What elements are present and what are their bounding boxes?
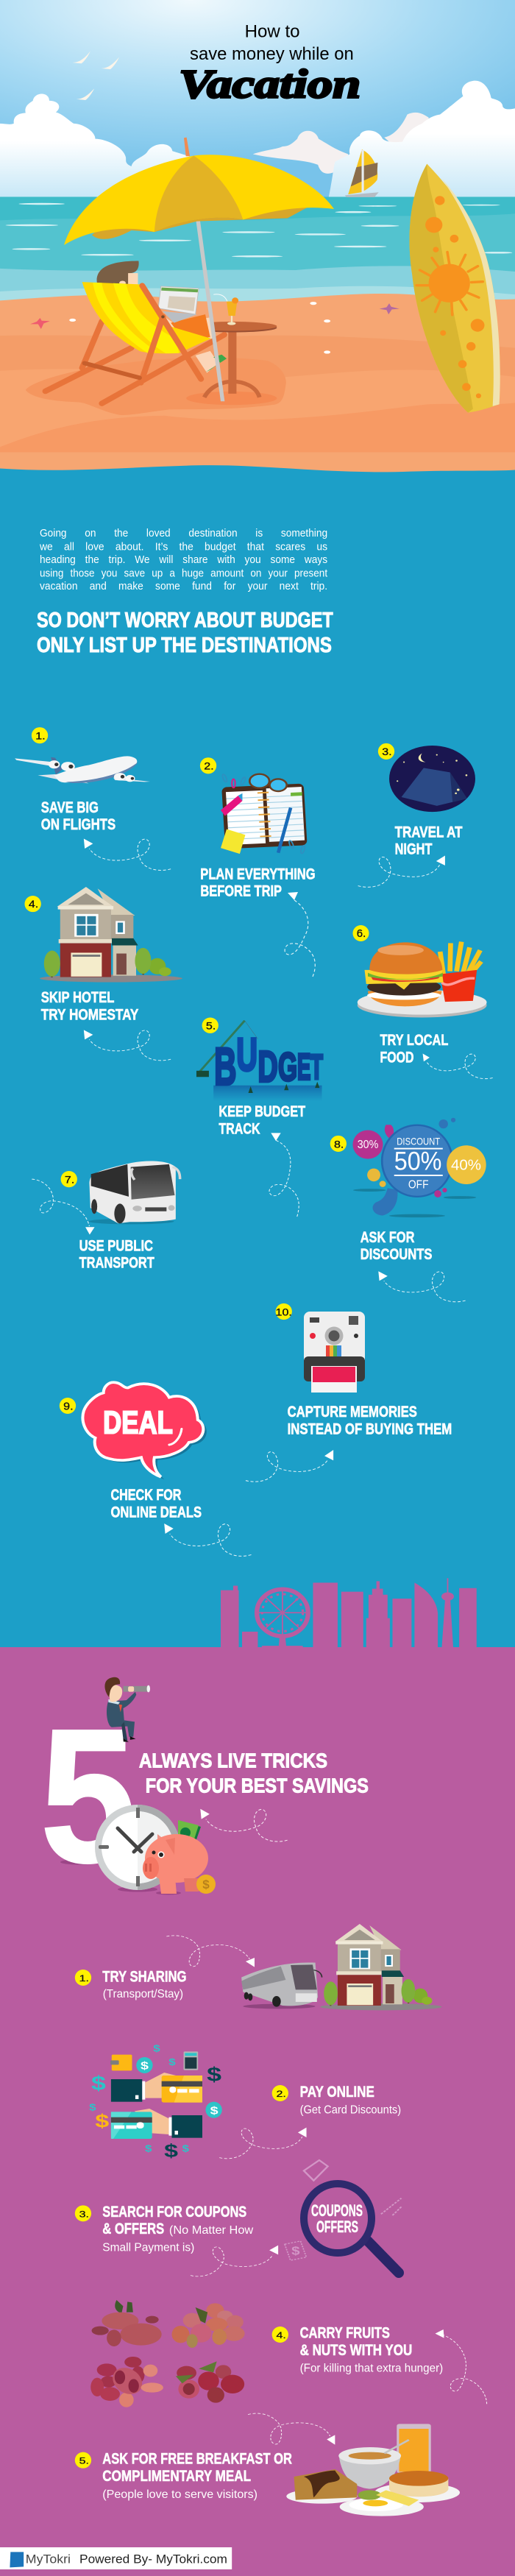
- trick 3 text: & OFFERS: [102, 2221, 164, 2237]
- icon: card payment: $: [145, 2143, 152, 2154]
- title: [179, 21, 360, 107]
- number 6: 6.: [357, 927, 366, 940]
- icon: budget: U: [236, 1028, 258, 1080]
- arrow: [248, 2413, 335, 2445]
- icon: card payment: $: [182, 2143, 190, 2154]
- skyline: [221, 1578, 477, 1648]
- umbrella: [64, 155, 334, 245]
- number 3: 3.: [382, 746, 392, 758]
- trick 1 text: TRY SHARING: [102, 1969, 187, 1985]
- icon: faint dollar ticket: $: [291, 2245, 299, 2257]
- trick 3 text: SEARCH FOR COUPONS: [102, 2204, 246, 2221]
- icon: card payment: $: [141, 2059, 149, 2072]
- heading: always live tricks: FOR YOUR BEST SAVINGS: [146, 1775, 369, 1797]
- label: keep budget track: TRACK: [219, 1119, 260, 1137]
- arrow: [166, 1936, 255, 1967]
- label: plan everything: BEFORE TRIP: [200, 882, 282, 899]
- panel: lower blue section: [0, 1382, 515, 1841]
- number 2: [272, 2085, 288, 2101]
- trick 5 text: COMPLIMENTARY MEAL: [102, 2468, 251, 2485]
- label: try local food: FOOD: [380, 1048, 414, 1066]
- label: plan everything: PLAN EVERYTHING: [200, 865, 316, 882]
- arrow: [436, 2329, 487, 2405]
- label: check for online deals: CHECK FOR: [110, 1485, 181, 1504]
- panel: intro and first tips: [15, 527, 475, 912]
- number 5: 5.: [206, 1021, 216, 1032]
- purple band edge: [0, 1647, 515, 1649]
- icon: white bus: [89, 1161, 180, 1224]
- number 1: [32, 727, 48, 743]
- icon: grey bus: [241, 1962, 322, 2009]
- icon: breakfast: [286, 2424, 460, 2516]
- icon: discount badge: 40%: [451, 1156, 481, 1173]
- intro paragraph: Going on the loved destination is something: [40, 527, 327, 539]
- heading: always live tricks: ALWAYS LIVE TRICKS: [139, 1750, 327, 1772]
- label: ask for discounts: ASK FOR: [360, 1228, 415, 1246]
- table: [188, 322, 277, 397]
- label: try local food: [380, 1031, 448, 1066]
- label: try local food: TRY LOCAL: [380, 1031, 448, 1049]
- arrow: [358, 855, 445, 887]
- shadow under chair: [26, 358, 286, 415]
- footer bar: [0, 2547, 232, 2569]
- panel: five tricks upper: [75, 1924, 441, 2215]
- main heading: SO DON’T WORRY ABOUT BUDGET: [37, 609, 333, 632]
- icon: card payment: $: [210, 2104, 219, 2117]
- icon: card payment: $: [91, 2072, 106, 2094]
- panel: middle tips: [32, 942, 493, 1320]
- umbrella pole: [184, 138, 224, 401]
- businessman with telescope: [104, 1677, 150, 1742]
- back clouds: [253, 113, 429, 174]
- cocktail glass: [213, 294, 238, 325]
- icon: budget: B: [214, 1038, 236, 1096]
- icon: discount badge: DISCOUNT: [397, 1136, 440, 1147]
- number 8: [330, 1136, 347, 1152]
- number 8: 8.: [334, 1139, 344, 1150]
- number 5: 5.: [79, 2457, 89, 2466]
- number 4: 4.: [276, 2331, 286, 2340]
- icon: airplane: [15, 756, 150, 783]
- icon: nuts: [90, 2300, 245, 2407]
- deck chair: [46, 282, 224, 403]
- number 1: 1.: [35, 730, 46, 742]
- intro paragraph: we all love about. It’s the budget that scares us: [39, 540, 327, 553]
- intro paragraph: heading the trip. We will share with you some ways: [40, 553, 327, 566]
- number 3: [75, 2205, 91, 2221]
- arrow: [269, 1133, 299, 1218]
- sand: [0, 294, 515, 482]
- number 9: [60, 1398, 76, 1414]
- icon: piggy bank: $: [202, 1878, 210, 1892]
- label: capture memories: INSTEAD OF BUYING THEM: [288, 1419, 452, 1437]
- label: keep budget track: [219, 1103, 305, 1137]
- label: ask for discounts: [360, 1228, 433, 1263]
- icon: card payment: [89, 2043, 222, 2162]
- icon: shopping bag: [10, 2552, 24, 2567]
- arrow: [32, 1179, 95, 1235]
- icon: magnifying glass: COUPONS: [311, 2201, 363, 2220]
- icon: burger and fries: [358, 942, 487, 1017]
- icon: faint scissors: [381, 2198, 402, 2215]
- arrow: [200, 1809, 288, 1841]
- panel: blue background: [0, 0, 515, 1647]
- number 1: 1.: [79, 1974, 89, 1984]
- icon: card payment: $: [153, 2043, 160, 2054]
- icon: instant camera: [304, 1312, 365, 1393]
- icon: house: [320, 1924, 441, 2010]
- label: save big on flights: ON FLIGHTS: [41, 815, 116, 833]
- icon: budget: D: [258, 1041, 278, 1091]
- sailboat: [345, 149, 379, 197]
- label: travel at night: TRAVEL AT: [395, 823, 463, 841]
- trick 5 text: (People love to serve visitors): [102, 2488, 258, 2501]
- man: [97, 261, 227, 373]
- trick 4 text: & NUTS WITH YOU: [300, 2342, 412, 2359]
- number 9: 9.: [63, 1401, 74, 1412]
- icon: house: [40, 887, 182, 983]
- number 2: 2.: [276, 2090, 286, 2099]
- label: keep budget track: KEEP BUDGET: [219, 1103, 305, 1120]
- label: travel at night: NIGHT: [395, 840, 433, 857]
- number 1: [75, 1970, 91, 1986]
- laptop: [158, 286, 199, 323]
- icon: faint dollar ticket: [285, 2241, 306, 2260]
- icon: faint price tag: [304, 2160, 328, 2181]
- panel: purple background: [0, 1647, 515, 2576]
- trick 4 text: (For killing that extra hunger): [300, 2362, 443, 2375]
- title: save money while on: [190, 44, 354, 64]
- title: How to: [245, 21, 300, 41]
- label: use public transport: USE PUBLIC: [79, 1236, 153, 1254]
- arrow: [219, 2128, 307, 2159]
- arrow: [246, 1450, 333, 1482]
- label: skip hotel: TRY HOMESTAY: [41, 1005, 139, 1023]
- icon: budget: [196, 1021, 323, 1101]
- trick 2 text: PAY ONLINE: [300, 2084, 374, 2101]
- number 5: [202, 1017, 219, 1033]
- trick 2 text: [300, 2084, 401, 2117]
- icon: card payment: $: [207, 2063, 222, 2085]
- trick 1 text: (Transport/Stay): [103, 1987, 183, 2000]
- label: capture memories: [288, 1402, 452, 1437]
- intro paragraph: [39, 527, 328, 592]
- footer bar: MyTokri: [26, 2552, 71, 2566]
- panel: five tricks lower: [0, 2204, 487, 2569]
- icon: notebook: [221, 774, 308, 854]
- arrow: [423, 1053, 493, 1079]
- label: save big on flights: SAVE BIG: [41, 798, 99, 816]
- panel: beach hero: [0, 0, 515, 482]
- number 7: [61, 1171, 77, 1187]
- number 10: 10.: [276, 1306, 292, 1318]
- arrow: [378, 1271, 466, 1302]
- icon: budget: E: [297, 1047, 310, 1088]
- trick 3 text: [102, 2204, 253, 2254]
- icon: discount badge: 50%: [394, 1147, 441, 1176]
- icon: piggy bank: [143, 1820, 216, 1894]
- label: skip hotel: SKIP HOTEL: [41, 988, 114, 1006]
- main heading: ONLY LIST UP THE DESTINATIONS: [37, 634, 332, 657]
- icon: discount badge: 30%: [358, 1137, 378, 1151]
- trick 3 text: Small Payment is): [102, 2241, 194, 2254]
- label: check for online deals: ONLINE DEALS: [110, 1502, 202, 1521]
- icon: night tent: [389, 746, 475, 812]
- icon: deal speech bubble: [82, 1382, 207, 1479]
- trick 5 text: ASK FOR FREE BREAKFAST OR: [102, 2451, 292, 2468]
- starfish and pebbles: [30, 302, 399, 354]
- number 5: [75, 2452, 91, 2469]
- icon: card payment: $: [95, 2111, 110, 2131]
- trick 4 text: [300, 2325, 443, 2375]
- label: capture memories: CAPTURE MEMORIES: [288, 1402, 417, 1420]
- icon: budget: T: [310, 1047, 323, 1086]
- arrow: [285, 892, 315, 977]
- arrow: [164, 1524, 252, 1556]
- label: ask for discounts: DISCOUNTS: [360, 1245, 433, 1263]
- icon: card payment: $: [168, 2057, 176, 2067]
- trick 5 text: [102, 2451, 292, 2501]
- number 3: 3.: [79, 2209, 89, 2220]
- title: Vacation: [179, 63, 360, 107]
- icon: card payment: $: [89, 2102, 96, 2113]
- intro paragraph: vacation and make some fund for your next trip.: [40, 580, 327, 592]
- label: use public transport: [79, 1236, 154, 1271]
- label: check for online deals: [110, 1485, 202, 1521]
- trick 4 text: CARRY FRUITS: [300, 2325, 390, 2342]
- number 4: 4.: [29, 899, 38, 910]
- label: skip hotel: [41, 988, 139, 1023]
- sea: [0, 197, 515, 305]
- label: use public transport: TRANSPORT: [79, 1253, 154, 1271]
- clouds: [0, 81, 515, 199]
- arrow: [84, 839, 171, 870]
- main heading: [37, 609, 333, 657]
- big numeral five: 5: [40, 1689, 136, 1902]
- number 4: [272, 2326, 288, 2343]
- heading: always live tricks: [139, 1750, 369, 1797]
- number 4: [24, 896, 41, 912]
- icon: magnifying glass: [304, 2184, 399, 2273]
- trick 1 text: [102, 1969, 187, 2000]
- label: plan everything: [200, 865, 316, 899]
- icon: budget: G: [278, 1045, 297, 1089]
- arrow: [191, 2246, 278, 2276]
- arrow: [84, 1030, 171, 1061]
- footer bar: Powered By- MyTokri.com: [79, 2552, 227, 2566]
- sky: [0, 0, 515, 199]
- birds: [72, 52, 119, 100]
- number 2: 2.: [204, 760, 214, 772]
- intro paragraph: using those you save up a huge amount on your present: [40, 567, 328, 579]
- trick 2 text: (Get Card Discounts): [300, 2103, 401, 2117]
- trick 3 text: (No Matter How: [169, 2223, 253, 2237]
- icon: deal speech bubble: DEAL: [103, 1404, 173, 1440]
- icon: discount badge: [352, 1118, 486, 1217]
- number 6: [353, 925, 369, 941]
- icon: magnifying glass: OFFERS: [316, 2218, 358, 2236]
- surfboard: [410, 164, 500, 413]
- number 3: [378, 743, 394, 760]
- label: save big on flights: [41, 798, 116, 833]
- icon: discount badge: OFF: [408, 1178, 429, 1191]
- icon: card payment: $: [164, 2141, 178, 2162]
- number 7: 7.: [65, 1175, 74, 1186]
- number 2: [200, 757, 216, 774]
- label: travel at night: [395, 823, 463, 857]
- icon: clock: [95, 1805, 180, 1892]
